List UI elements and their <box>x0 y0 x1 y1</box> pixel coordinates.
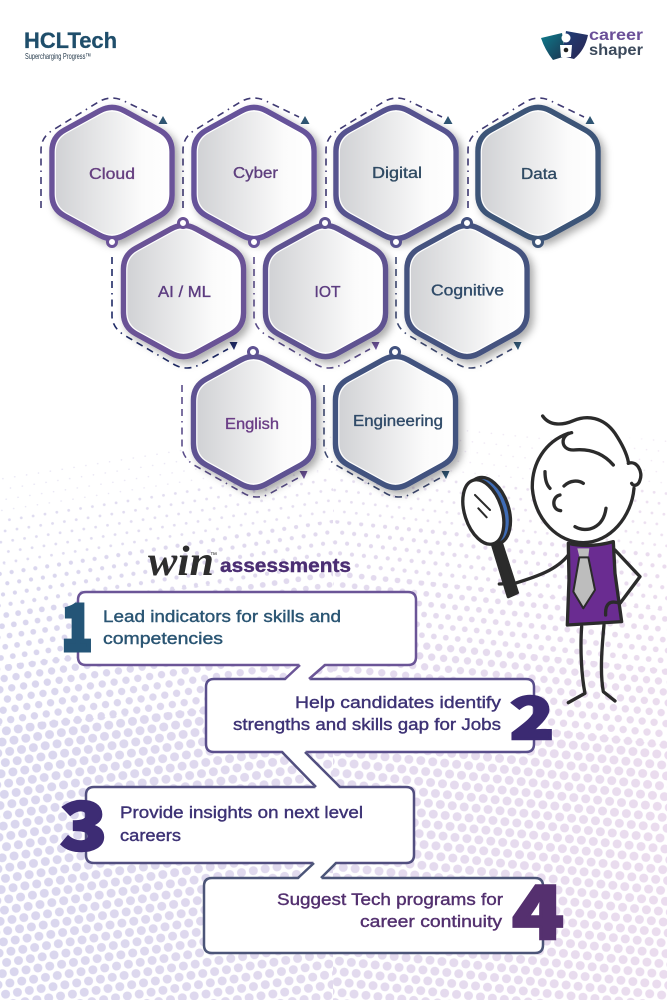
card 2: Help candidates: strengths and skills gap for Jobs <box>233 715 501 734</box>
hexagon: Cloud: Cloud <box>89 166 135 183</box>
hexagon: Data <box>478 107 598 239</box>
hexagon: Digital: Digital <box>372 165 422 182</box>
card 1: Lead indicators: Lead indicators for skills and <box>103 607 341 626</box>
heading: WIN assessments: assessments <box>220 555 351 577</box>
number 2: 2 <box>510 672 554 756</box>
card 3: Provide insights <box>60 774 414 870</box>
connector: card 3 to card 4 <box>298 861 336 880</box>
logo: career shaper: shaper <box>589 42 643 59</box>
card 1: Lead indicators: competencies <box>103 629 223 648</box>
card 2: Help candidates <box>206 672 554 756</box>
number 1: 1 <box>62 578 92 668</box>
heading: WIN assessments: win <box>148 539 214 585</box>
hexagon: IOT: IOT <box>314 284 341 301</box>
hexagon: Cyber <box>194 107 314 239</box>
logo: career shaper <box>541 27 643 60</box>
dashed arrow: row one <box>41 98 594 208</box>
hexagon: English <box>194 356 314 488</box>
hexagon: Digital <box>336 107 456 239</box>
card 2: Help candidates: Help candidates identify <box>295 693 502 712</box>
dashed arrow: row three <box>182 385 450 497</box>
connector rings <box>108 218 542 356</box>
heading: WIN assessments: ™ <box>210 552 217 559</box>
card 3: Provide insights: careers <box>120 826 181 845</box>
hexagon: Data: Data <box>521 166 557 183</box>
number 4: 4 <box>512 854 564 961</box>
dashed arrow: row two <box>112 257 522 368</box>
card 1: Lead indicators <box>62 578 416 668</box>
card 3: Provide insights: Provide insights on next level <box>120 803 363 822</box>
hexagon: Cloud <box>52 107 172 239</box>
hexagon: Cognitive <box>407 225 527 357</box>
hexagon: IOT <box>266 225 386 357</box>
logo: career shaper: career <box>589 27 643 44</box>
logo: HCLTech: Supercharging Progress™ <box>25 51 91 61</box>
hexagon: Engineering <box>336 356 456 488</box>
logo: HCLTech: HCLTech <box>24 28 117 53</box>
illustration: character with magnifying glass <box>455 416 641 703</box>
hexagon: AI / ML: AI / ML <box>158 284 211 301</box>
card 4: Suggest Tech programs <box>204 854 564 961</box>
connector: card 2 to card 3 <box>282 750 340 789</box>
hexagon: Cognitive: Cognitive <box>431 282 504 300</box>
hexagon: Engineering: Engineering <box>353 413 443 430</box>
card 4: Suggest Tech programs: career continuity <box>360 912 503 931</box>
card 4: Suggest Tech programs: Suggest Tech programs for <box>277 890 503 909</box>
connector: card 1 to card 2 <box>285 663 325 681</box>
hexagon: English: English <box>225 416 279 433</box>
hexagon: Cyber: Cyber <box>233 165 278 182</box>
hexagon: AI / ML <box>124 225 244 357</box>
heading: WIN assessments <box>148 539 351 585</box>
number 3: 3 <box>60 774 107 870</box>
